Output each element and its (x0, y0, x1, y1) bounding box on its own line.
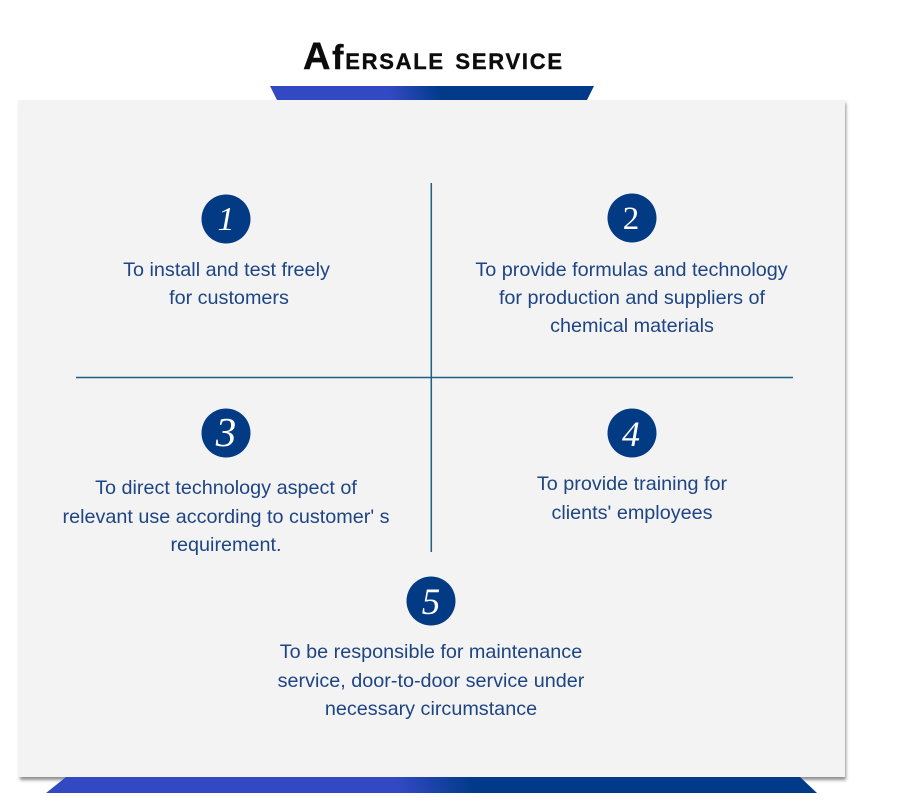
item 4 (537, 408, 728, 524)
item 1: To install and test freely (123, 259, 330, 281)
item 3: To direct technology aspect of (95, 477, 357, 499)
panel: service list background (18, 100, 845, 777)
item 4: 4 (622, 414, 640, 454)
item 2 (475, 194, 788, 337)
item 4: clients' employees (551, 502, 713, 524)
title: Afersale service (303, 36, 562, 78)
horizontal divider (76, 376, 793, 378)
item 5 (278, 576, 585, 720)
item 5: service, door-to-door service under (278, 670, 585, 692)
item 3 (62, 408, 390, 556)
item 3: relevant use according to customer' s (62, 506, 390, 528)
panel shadow (20, 103, 846, 780)
item 1: 1 (218, 201, 234, 238)
top ribbon (270, 86, 594, 100)
item 4: To provide training for (537, 473, 728, 495)
item 5: To be responsible for maintenance (280, 641, 582, 663)
item 5: necessary circumstance (325, 698, 537, 720)
item 5: 5 (422, 582, 440, 623)
item 1: for customers (169, 287, 289, 309)
item 1 (123, 194, 330, 309)
item 2: chemical materials (550, 315, 714, 337)
vertical divider (430, 183, 432, 552)
item 2: for production and suppliers of (499, 287, 766, 309)
bottom ribbon (46, 777, 817, 793)
item 2: 2 (623, 201, 639, 237)
item 3: 3 (215, 409, 236, 455)
item 3: requirement. (170, 534, 282, 556)
item 2: To provide formulas and technology (475, 259, 788, 281)
